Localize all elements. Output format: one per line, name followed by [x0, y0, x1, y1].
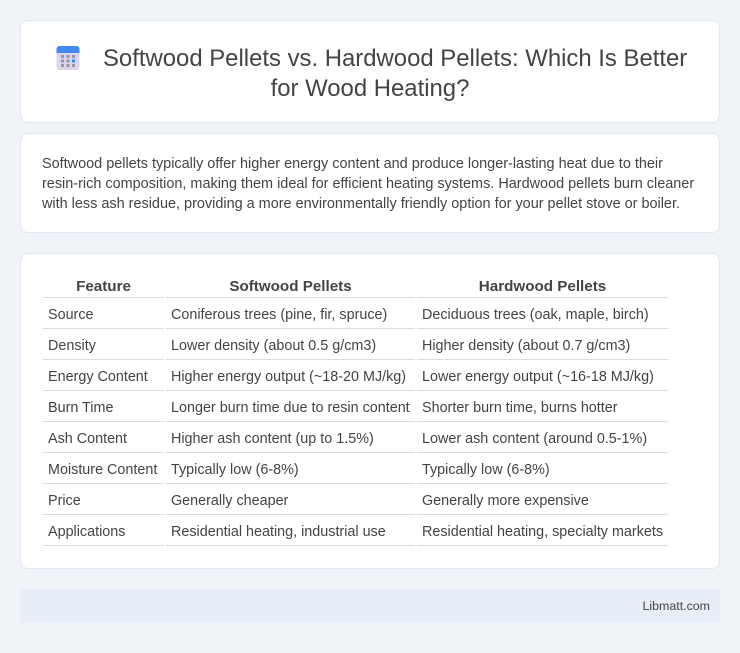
- row: applications: [43, 524, 668, 546]
- panel: comparison table: [20, 253, 720, 569]
- row: price: Generally cheaper: [171, 493, 288, 509]
- title: for Wood Heating?: [271, 75, 469, 102]
- row: energy content: [43, 369, 668, 391]
- table header: Softwood Pellets: [229, 278, 352, 295]
- panel: introduction: [20, 133, 720, 233]
- row: applications: Residential heating, specialty markets: [422, 524, 663, 540]
- row: energy content: Energy Content: [48, 369, 148, 385]
- row: burn time: Shorter burn time, burns hotter: [422, 400, 618, 416]
- table header: Hardwood Pellets: [479, 278, 606, 295]
- row: source: Coniferous trees (pine, fir, spruce): [171, 307, 387, 323]
- row: burn time: [43, 400, 668, 422]
- footer bar: [20, 589, 720, 623]
- row: price: [43, 493, 668, 515]
- row: price: Price: [48, 493, 81, 509]
- row: density: [43, 338, 668, 360]
- table header: Feature: [76, 278, 131, 295]
- intro text: Softwood pellets typically offer higher energy content and produce longer-lasting heat due to their: [42, 156, 663, 172]
- row: ash content: Ash Content: [48, 431, 127, 447]
- footer text: Libmatt.com: [643, 599, 710, 613]
- row: ash content: [43, 431, 668, 453]
- row: energy content: Lower energy output (~16-18 MJ/kg): [422, 369, 654, 385]
- intro text: resin-rich composition, making them ideal for efficient heating systems. Hardwood pellets burn cleaner: [42, 176, 694, 192]
- row: source: [43, 307, 668, 329]
- row: applications: Applications: [48, 524, 125, 540]
- row: moisture content: Typically low (6-8%): [422, 462, 550, 478]
- row: source: Source: [48, 307, 94, 323]
- intro text: with less ash residue, providing a more environmentally friendly option for your pellet stove or boiler.: [42, 196, 680, 212]
- row: density: Density: [48, 338, 96, 354]
- intro text: [42, 156, 694, 212]
- row: source: Deciduous trees (oak, maple, birch): [422, 307, 649, 323]
- row: density: Higher density (about 0.7 g/cm3): [422, 338, 630, 354]
- comparison table: [43, 278, 668, 546]
- row: burn time: Burn Time: [48, 400, 113, 416]
- icon: calendar grid: [56, 46, 80, 70]
- row: energy content: Higher energy output (~18-20 MJ/kg): [171, 369, 406, 385]
- table header: [43, 278, 668, 298]
- row: burn time: Longer burn time due to resin content: [171, 400, 410, 416]
- row: price: Generally more expensive: [422, 493, 589, 509]
- row: moisture content: Moisture Content: [48, 462, 157, 478]
- row: density: Lower density (about 0.5 g/cm3): [171, 338, 376, 354]
- title: [103, 45, 687, 102]
- title: Softwood Pellets vs. Hardwood Pellets: Which Is Better: [103, 45, 687, 72]
- row: moisture content: [43, 462, 668, 484]
- row: ash content: Lower ash content (around 0.5-1%): [422, 431, 647, 447]
- row: moisture content: Typically low (6-8%): [171, 462, 299, 478]
- row: ash content: Higher ash content (up to 1.5%): [171, 431, 374, 447]
- row: applications: Residential heating, industrial use: [171, 524, 386, 540]
- panel: title card: [20, 20, 720, 123]
